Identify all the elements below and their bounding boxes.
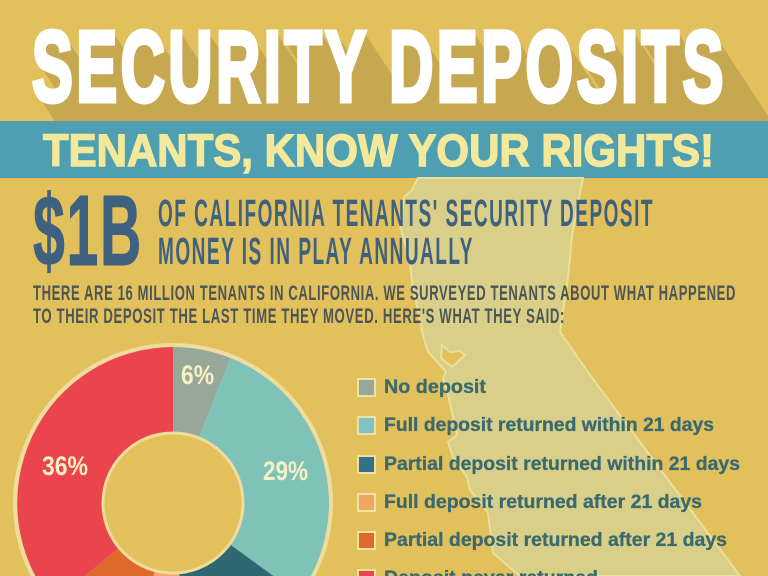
donut hole [103,433,243,573]
label 29%: 29% [263,456,308,486]
legend item: partial deposit within 21 days: Partial deposit returned within 21 days [384,454,740,475]
survey intro text [33,282,736,328]
legend [358,377,740,576]
slice: partial deposit after 21 days [53,503,173,576]
slice: partial deposit within 21 days [173,503,299,576]
California map [400,178,740,576]
legend item: no deposit: No deposit [384,377,487,398]
slice: no deposit 6% [173,347,230,503]
label 36%: 36% [42,451,88,481]
legend item: full deposit after 21 days: Full deposit returned after 21 days [384,492,702,513]
donut chart [13,343,333,576]
legend item: full deposit within 21 days: Full deposit returned within 21 days [384,415,714,436]
banner: TENANTS, KNOW YOUR RIGHTS! [43,125,714,176]
label 6%: 6% [181,360,214,390]
headline statistic: $1B: $1B [33,175,143,287]
slice: deposit never returned 36% [17,347,173,576]
title: SECURITY DEPOSITS [32,11,727,121]
headline text [158,193,654,273]
legend item: partial deposit after 21 days: Partial deposit returned after 21 days [384,530,727,551]
slice: full deposit after 21 days [133,503,187,576]
slice: full deposit within 21 days 29% [173,358,329,576]
